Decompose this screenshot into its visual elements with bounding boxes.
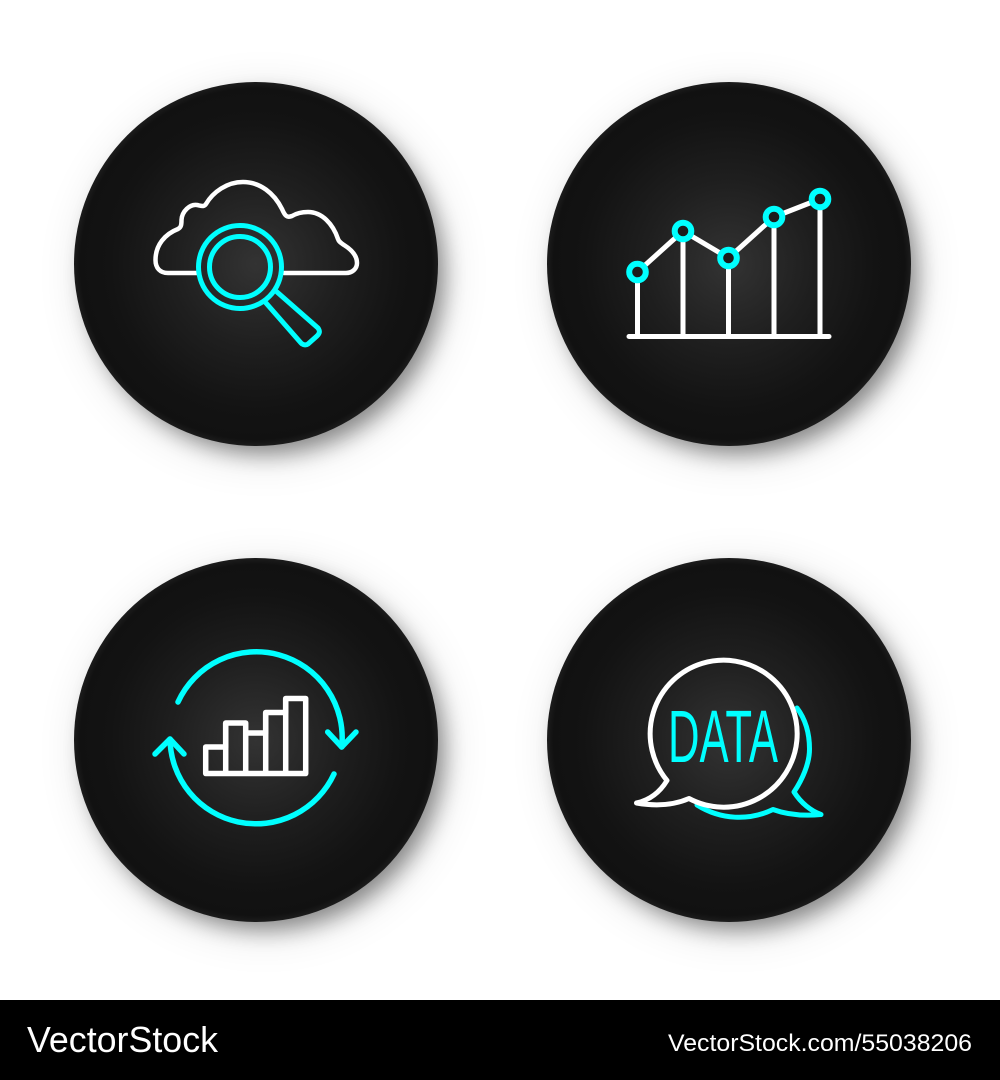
- panel: refresh bars badge: [74, 558, 450, 936]
- icon: bar steps: [206, 698, 306, 774]
- icon: front bubble: [636, 660, 797, 807]
- text: DATA label: DATA: [668, 695, 778, 778]
- icon: chart markers: [629, 191, 828, 280]
- icon: magnifying glass: [198, 226, 319, 345]
- panel: data speech bubble badge: [547, 558, 923, 936]
- footer bar: [0, 1000, 1000, 1080]
- icon: chart lines: [629, 199, 829, 336]
- icon: cloud: [156, 182, 357, 273]
- panel: cloud search badge: [74, 82, 450, 460]
- panel: line chart badge: [547, 82, 923, 460]
- icon: back bubble: [697, 708, 821, 817]
- text: image reference: VectorStock.com/55038206: [668, 1030, 972, 1057]
- text: brand name: VectorStock: [27, 1019, 219, 1060]
- icon: refresh arrows: [155, 652, 356, 824]
